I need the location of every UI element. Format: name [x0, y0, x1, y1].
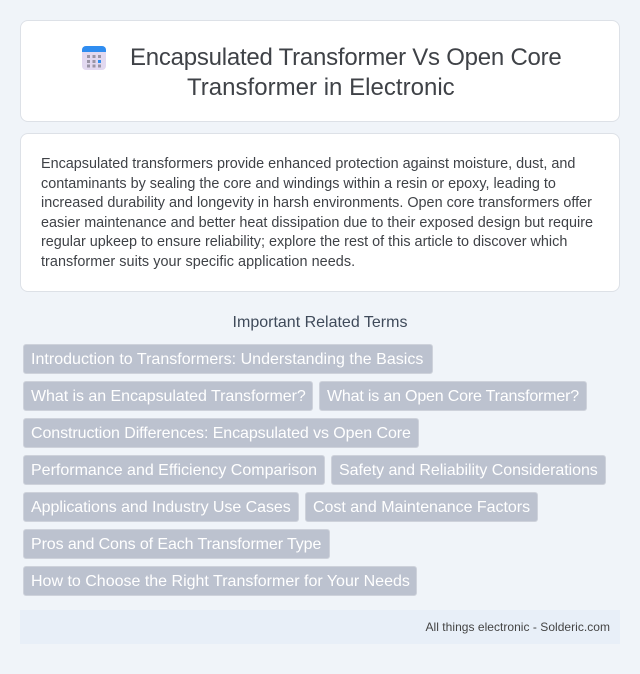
summary text: increased durability and longevity in harsh environments. Open core transformers offer	[41, 195, 592, 211]
title: Transformer in Electronic	[187, 74, 455, 101]
footer text: All things electronic - Solderic.com	[426, 620, 610, 634]
tag: Performance and Efficiency Comparison	[31, 462, 317, 479]
tag	[23, 492, 299, 522]
tag: What is an Encapsulated Transformer?	[31, 388, 306, 405]
icon: calendar	[82, 46, 106, 70]
tag: Introduction to Transformers: Understanding the Basics	[31, 351, 423, 368]
summary text: easier maintenance and better heat dissipation due to their exposed design but require	[41, 215, 593, 231]
tag: Applications and Industry Use Cases	[31, 499, 291, 516]
tag: Pros and Cons of Each Transformer Type	[31, 536, 321, 553]
title	[130, 44, 562, 101]
summary text panel	[20, 133, 620, 292]
tag	[23, 344, 433, 374]
tag list	[23, 344, 606, 596]
tag	[305, 492, 538, 522]
footer bar	[20, 610, 620, 644]
tag	[23, 566, 417, 596]
title: Encapsulated Transformer Vs Open Core	[130, 44, 562, 71]
tag: How to Choose the Right Transformer for Your Needs	[31, 573, 410, 590]
tag	[319, 381, 587, 411]
summary text	[41, 156, 593, 270]
summary text: transformer suits your specific application needs.	[41, 254, 355, 270]
tag	[23, 418, 419, 448]
tag: What is an Open Core Transformer?	[327, 388, 579, 405]
header card	[20, 20, 620, 122]
tag	[23, 455, 325, 485]
tag	[23, 529, 330, 559]
tag: Safety and Reliability Considerations	[339, 462, 598, 479]
tag	[331, 455, 606, 485]
summary text: contaminants by sealing the core and windings within a resin or epoxy, leading to	[41, 176, 556, 192]
summary text: regular upkeep to ensure reliability; explore the rest of this article to discover which	[41, 234, 567, 250]
tag	[23, 381, 313, 411]
related terms heading: Important Related Terms	[233, 314, 407, 331]
summary text: Encapsulated transformers provide enhanced protection against moisture, dust, and	[41, 156, 575, 172]
tag: Construction Differences: Encapsulated vs Open Core	[31, 425, 411, 442]
tag: Cost and Maintenance Factors	[313, 499, 530, 516]
